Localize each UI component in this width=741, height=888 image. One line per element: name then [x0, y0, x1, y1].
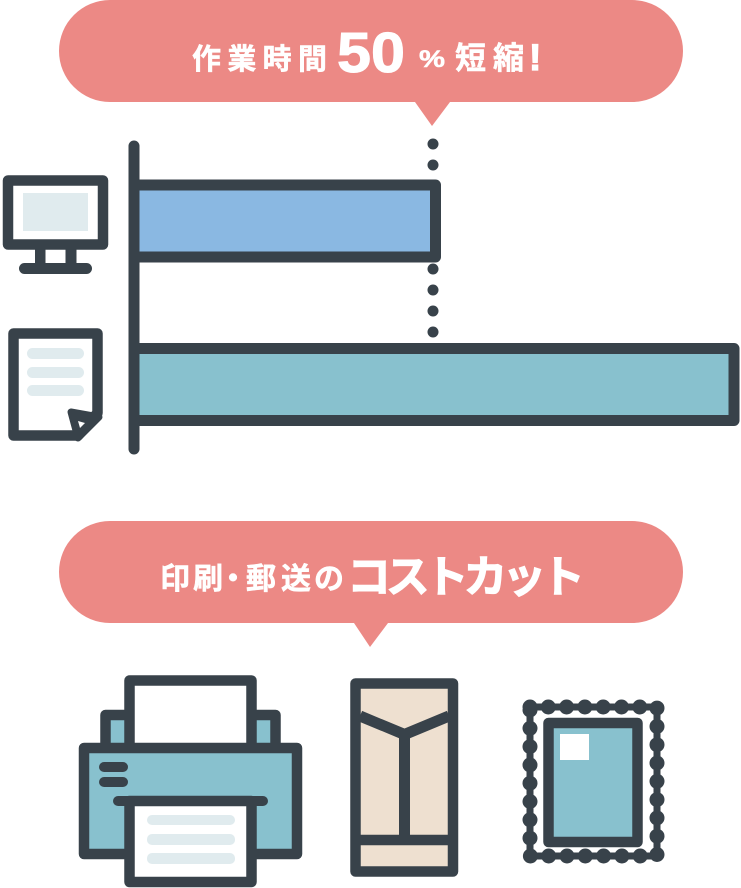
- icon: envelope: [356, 684, 453, 872]
- chart axis: [128, 146, 140, 449]
- callout text: printing and mailing cost cut: ・: [218, 563, 248, 596]
- bar: paper, 100%: [134, 348, 734, 420]
- callout text: time reduction: 短縮: [455, 41, 524, 76]
- callout text: time reduction: %: [419, 46, 445, 73]
- callout text: printing and mailing cost cut: 印刷: [160, 563, 223, 596]
- callout text: time reduction: 50: [337, 21, 405, 85]
- icon: postage stamp: [530, 707, 657, 856]
- callout text: printing and mailing cost cut: [160, 553, 585, 602]
- dotted guide line: [428, 138, 438, 338]
- callout text: time reduction: [192, 21, 541, 85]
- callout text: time reduction: 作業時間: [192, 43, 327, 76]
- icon: printer: [84, 680, 297, 882]
- callout text: time reduction: !: [529, 37, 541, 78]
- callout text: printing and mailing cost cut: コストカット: [347, 553, 585, 602]
- bar: digital, 50%: [134, 185, 436, 257]
- icon: paper document: [14, 334, 99, 438]
- callout text: printing and mailing cost cut: 郵送: [246, 563, 311, 596]
- callout text: printing and mailing cost cut: の: [314, 563, 344, 596]
- callout: 50% time reduction: [59, 0, 683, 126]
- icon: monitor: [8, 180, 103, 274]
- callout: cost cut: [59, 521, 683, 647]
